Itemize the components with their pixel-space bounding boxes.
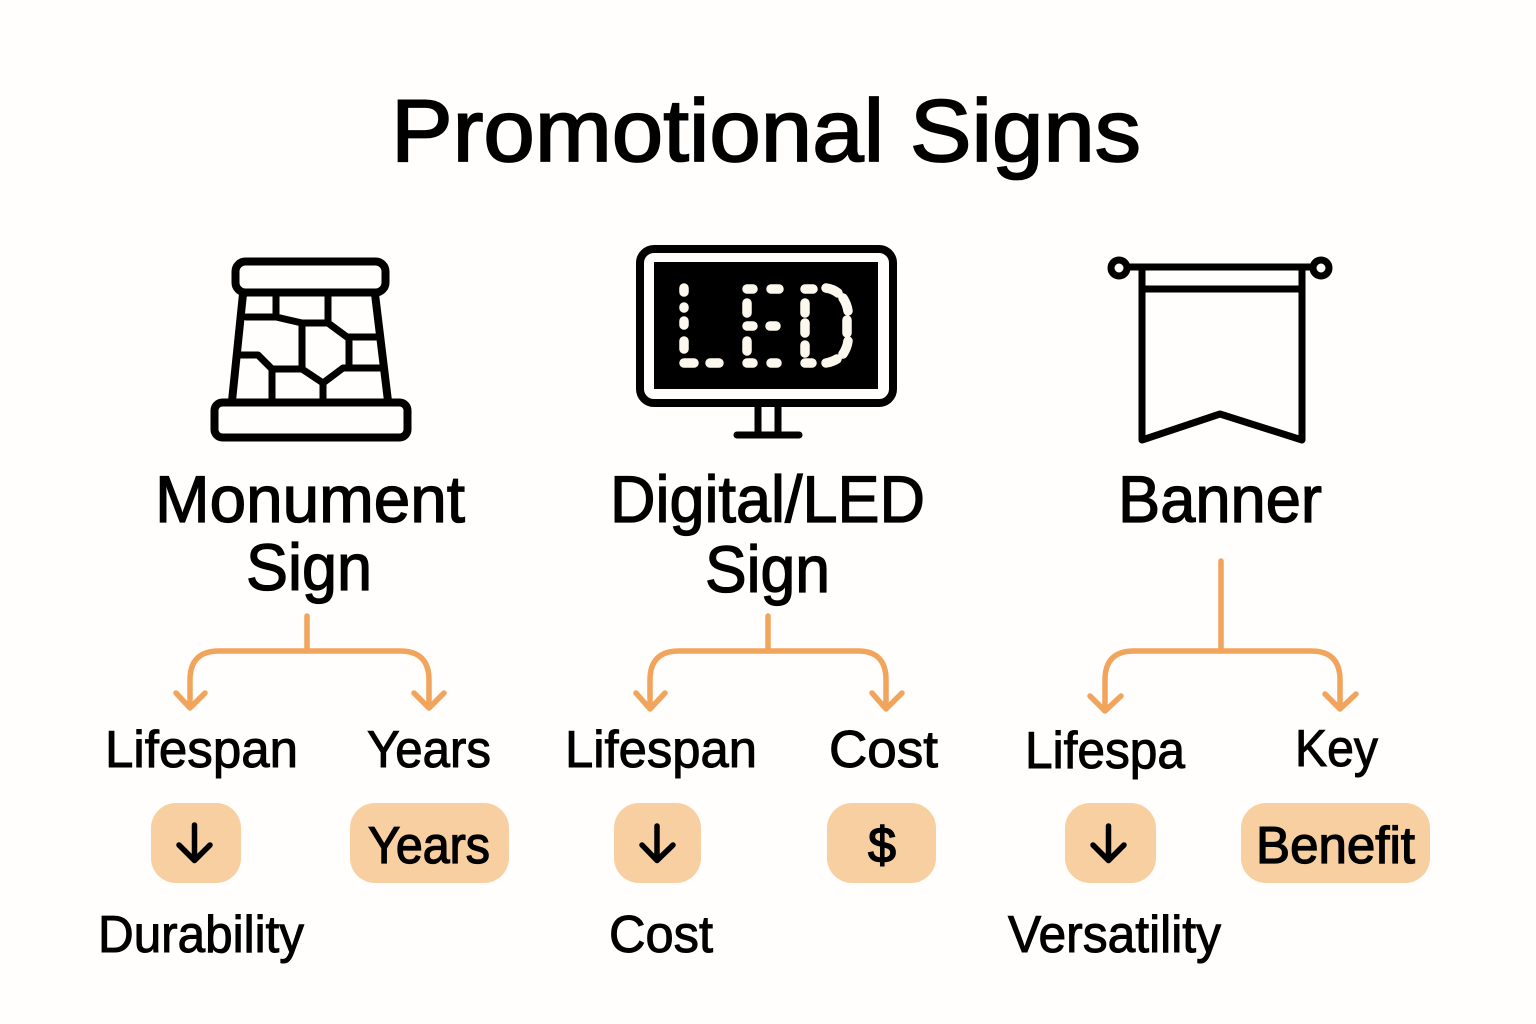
badge: years: Years: [368, 817, 490, 875]
badge: down arrow: [151, 803, 241, 883]
badge: down arrow: [1065, 803, 1156, 883]
arrows: digital branches: [636, 616, 902, 709]
label: key: Key: [1295, 720, 1378, 778]
label: banner: Banner: [1118, 462, 1322, 536]
badge: down arrow: [614, 803, 701, 883]
label: years: Years: [367, 721, 491, 779]
arrows: monument branches: [176, 616, 444, 708]
label: lifespa: Lifespa: [1025, 722, 1185, 780]
arrows: banner branches: [1090, 561, 1356, 711]
label: monument sign: Sign: [246, 530, 372, 604]
panel: digital LED sign: [565, 249, 939, 964]
panel: banner: [1008, 260, 1430, 964]
icon: banner: [1111, 260, 1329, 440]
label: lifespan: Lifespan: [105, 721, 298, 779]
badge: benefit: [1241, 803, 1430, 883]
label: digital/LED sign: Digital/LED: [610, 462, 925, 536]
label: lifespan: Lifespan: [565, 721, 757, 779]
label: cost: Cost: [829, 721, 939, 779]
icon: LED monitor: [640, 249, 893, 435]
label: versatility: Versatility: [1008, 906, 1221, 964]
panel: monument sign: [98, 262, 509, 964]
title: Promotional Signs: [391, 81, 1141, 180]
badge: benefit: Benefit: [1256, 817, 1416, 875]
icon: monument sign: [214, 262, 408, 438]
badge: dollar: [827, 803, 936, 883]
label: digital/LED sign: Sign: [705, 532, 830, 606]
label: monument sign: Monument: [155, 462, 465, 536]
badge: years: [350, 803, 509, 883]
label: durability: Durability: [98, 906, 304, 964]
badge: dollar: $: [868, 817, 896, 873]
label: cost: Cost: [609, 906, 714, 964]
